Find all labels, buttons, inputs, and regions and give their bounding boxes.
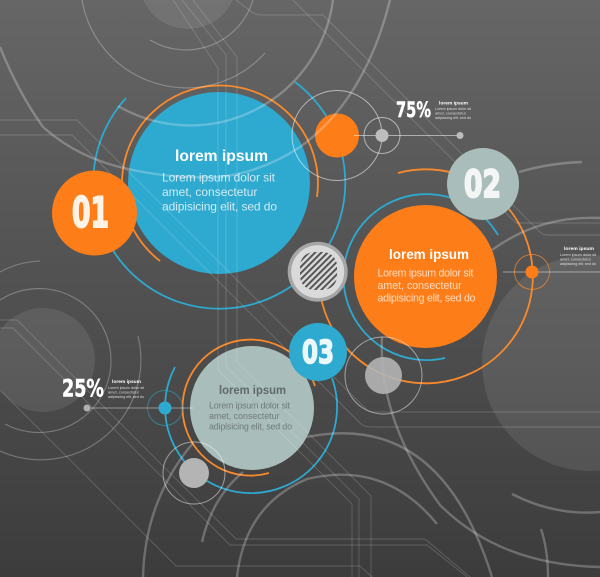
decorative arcs [0,0,265,460]
badge: 03 [289,323,347,381]
text block: circle 1: adipisicing elit, sed do [162,200,277,214]
ring [514,254,550,290]
circle 2 fill [354,205,497,348]
small text: Lorem ipsum dolor sit [108,385,145,390]
small text [560,252,597,266]
text block: circle 3: adipisicing elit, sed do [209,422,292,432]
small text: Lorem ipsum dolor sit [435,106,472,111]
circle 1 text [162,148,277,214]
text block: circle 2: adipisicing elit, sed do [378,292,476,304]
small text: adipisicing elit, sed do [560,261,596,266]
heading: circle 1: lorem ipsum [175,148,268,165]
badge: 02 [447,148,519,220]
small text [108,385,145,399]
icon: dots [376,129,464,142]
small text [435,106,472,120]
text block: circle 3: Lorem ipsum dolor sit [209,400,291,410]
small text: Lorem ipsum dolor sit [560,252,597,257]
text block: circle 3 [209,400,292,432]
text block: circle 1: Lorem ipsum dolor sit [162,170,276,184]
icon: orange dot [526,266,538,278]
small text: amet, consectetur [435,110,467,116]
ring: circle 2 blue [343,194,498,360]
ring [148,390,182,426]
panel: circle 3 fill [190,346,314,470]
icon: small orange disc [315,114,359,158]
text block: circle 2 [378,268,476,304]
small text: adipisicing elit, sed do [435,115,471,120]
text block: circle 1: amet, consectetur [162,185,257,199]
heading: circle 3: lorem ipsum [219,385,286,397]
icon: striped disc [288,242,348,302]
ring: circle 2 orange [319,169,533,383]
connector [503,271,600,273]
ring: circle 1 blue [93,82,345,309]
heading: circle 2: lorem ipsum [389,247,469,262]
badge: 01: 01 [72,188,109,237]
text block: circle 2: amet, consectetur [378,280,462,292]
small text: amet, consectetur [108,390,140,394]
icon: ring node [292,90,400,180]
callout: 25% [62,374,193,426]
label: lorem ipsum [112,379,141,384]
badge: 03: 03 [302,333,334,371]
label: lorem ipsum [564,246,594,251]
ring: circle 3 orange [183,340,315,476]
panel: circle 2 [354,205,497,348]
callout: right [503,246,600,290]
icon: blue dot [158,402,172,414]
ring: circle 1 orange [122,85,318,261]
icon: grey node upper [345,337,422,414]
number: 25%: 25% [62,374,104,402]
panel: circle 1 fill [128,92,310,274]
badge: 02: 02 [464,163,501,206]
badge: 01 [52,170,137,256]
callout: 75% [292,90,472,180]
number: 75%: 75% [396,98,431,122]
text block: circle 2: Lorem ipsum dolor sit [378,268,474,280]
icon: end dot [84,404,90,412]
text block: circle 3: amet, consectetur [209,411,280,421]
small text: adipisicing elit, sed do [108,394,144,399]
icon: grey node lower [163,442,225,504]
circle 3 text [209,385,292,432]
label: lorem ipsum [439,100,468,106]
text block: circle 1 [162,170,277,214]
connector [87,407,193,409]
small text: amet, consectetur [560,256,592,262]
connector [354,134,460,136]
ring: circle 3 blue [165,367,337,493]
